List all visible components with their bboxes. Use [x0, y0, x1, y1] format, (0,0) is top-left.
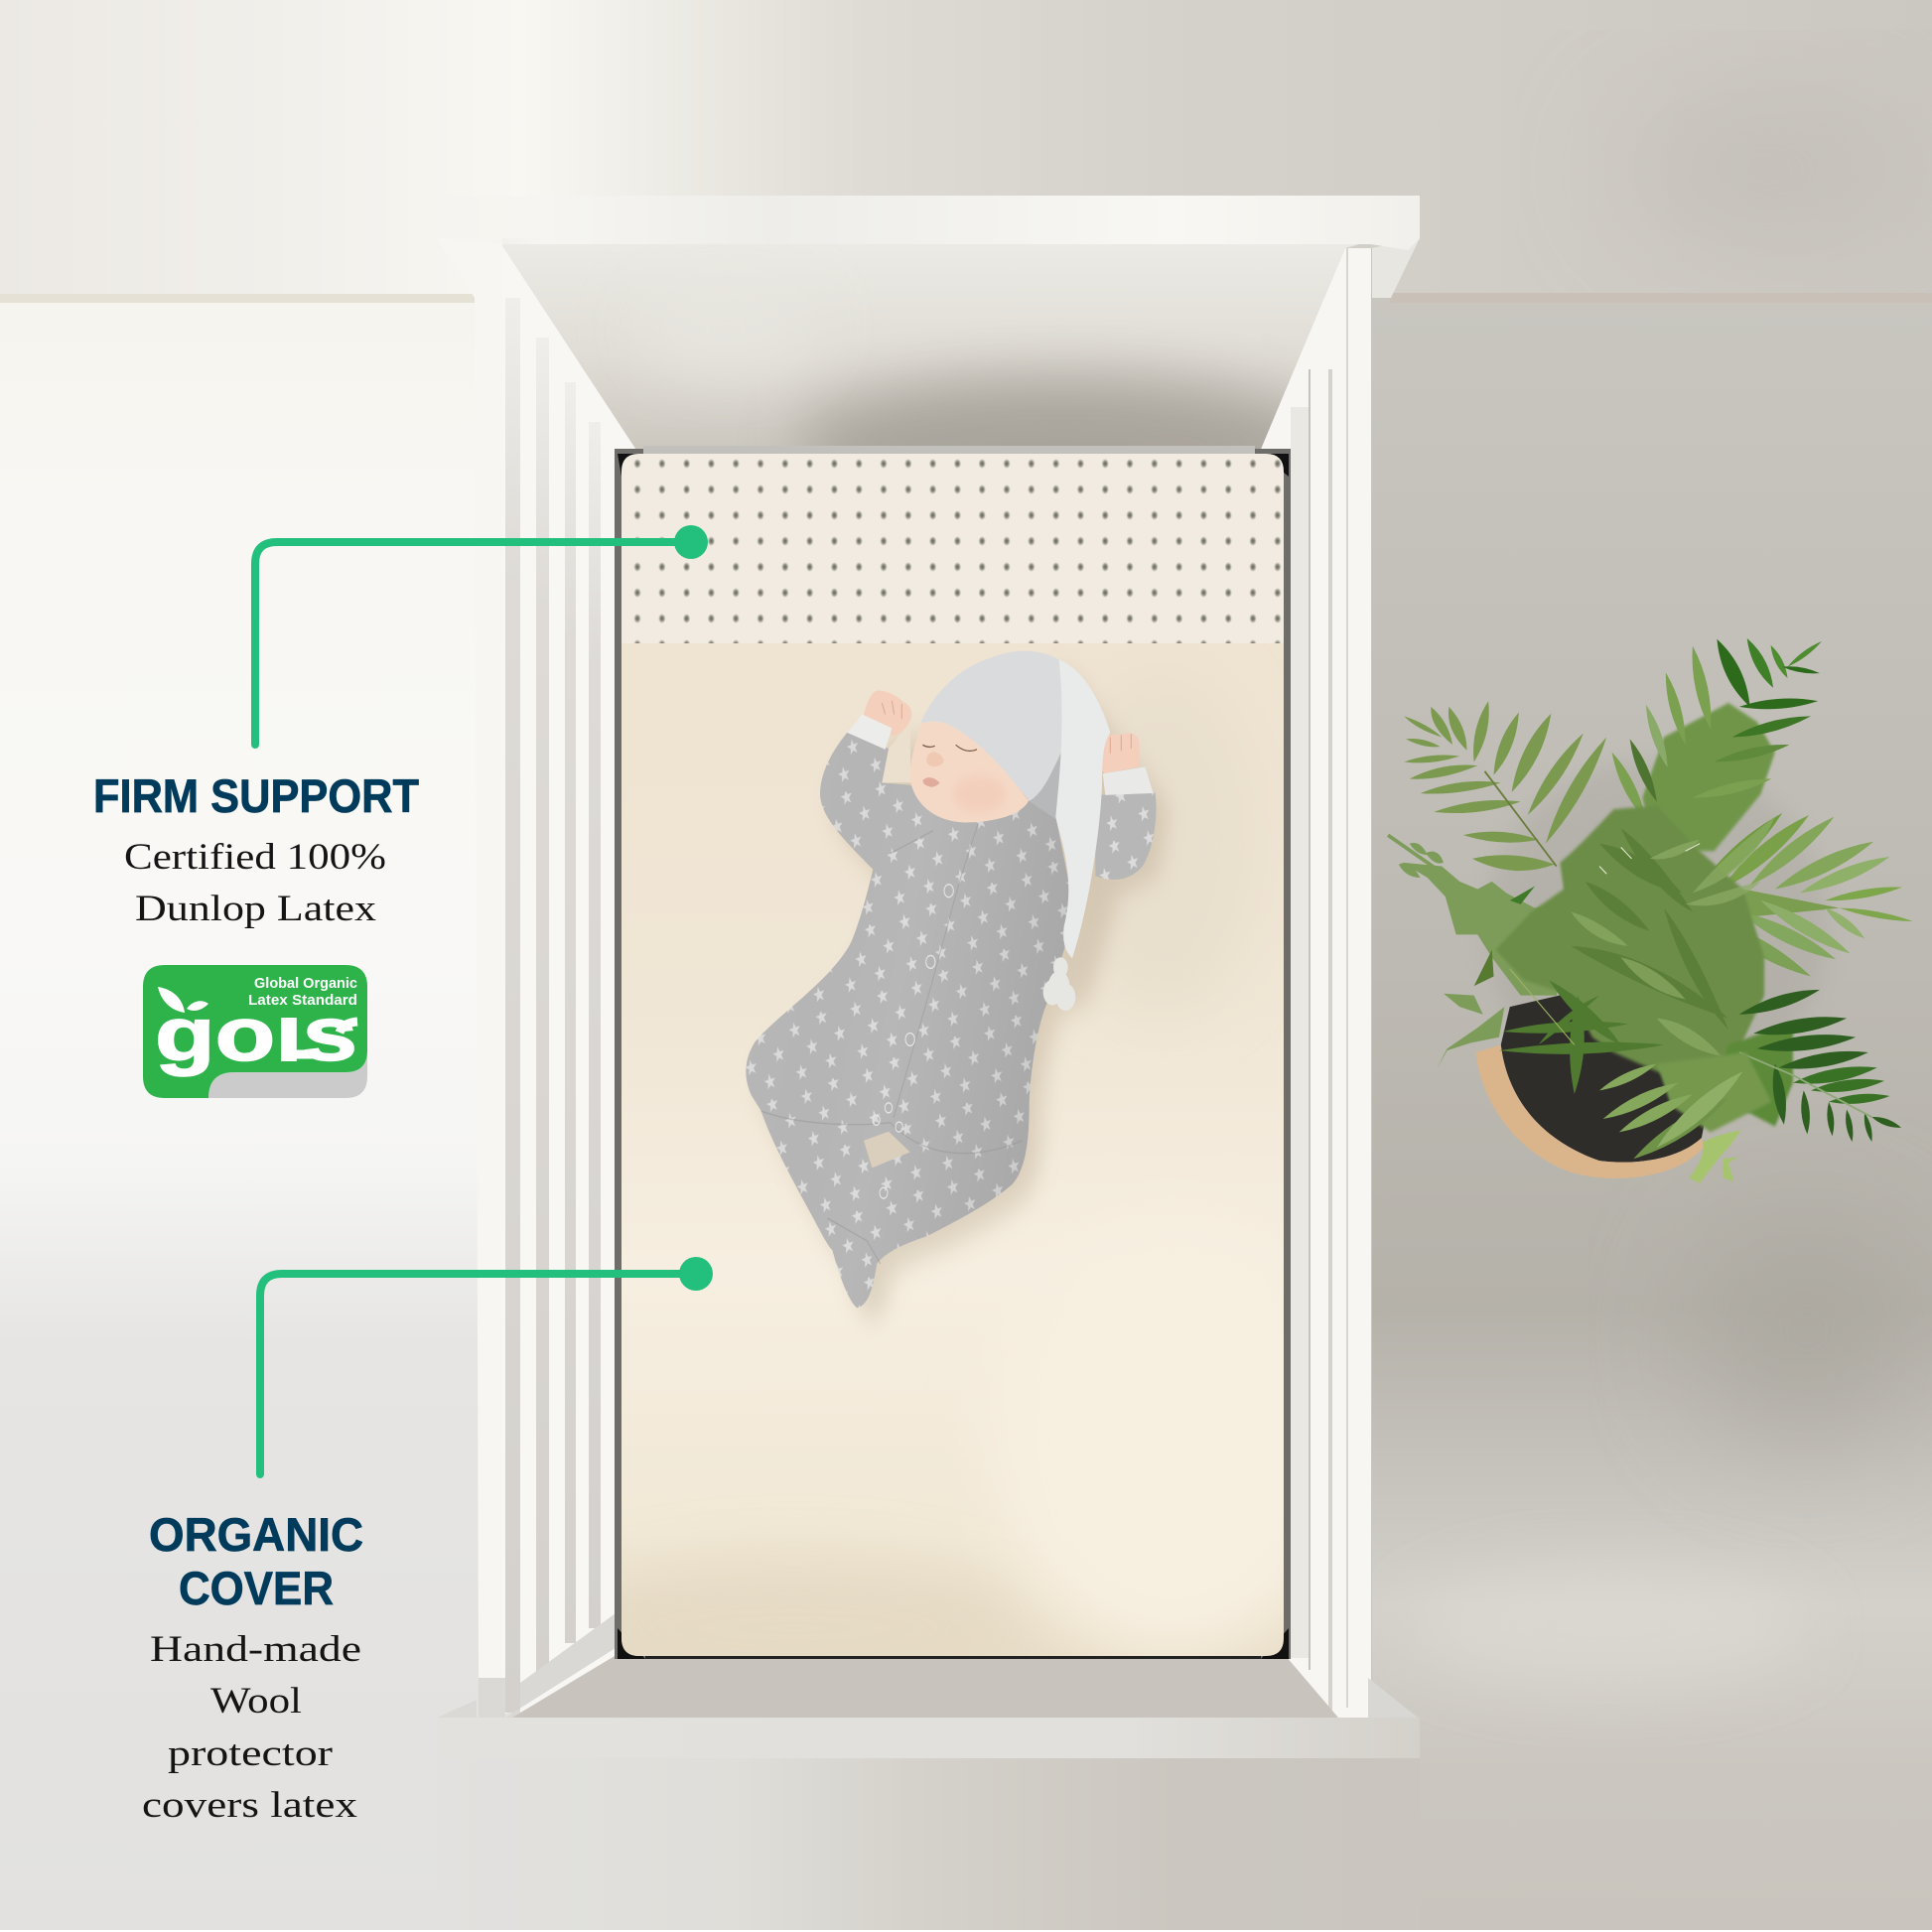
central foliage mass: [1495, 805, 1775, 1094]
text block: organic cover description: protector: [168, 1733, 333, 1774]
baby sleeping on the mattress: [746, 651, 1169, 1321]
heading: organic cover: [149, 1508, 363, 1614]
cap pompom: [1043, 957, 1075, 1011]
star-print onesie: [746, 733, 1072, 1308]
text block: firm support description: Certified 100%: [124, 837, 386, 878]
foot panel of the crib: [512, 1656, 1338, 1718]
right sleeve and cuff: [1095, 766, 1157, 880]
callout: organic cover connector: [260, 1257, 713, 1474]
text block: organic cover description: Hand-made: [150, 1629, 361, 1670]
frond: upper left: [1404, 701, 1606, 871]
left side rail with slats: [437, 238, 637, 1718]
left cuff: [847, 715, 892, 750]
head panel of the crib with soft shadow: [502, 244, 1358, 449]
panel: mattress wool cover: [621, 643, 1284, 1656]
gap between arm and head: [882, 724, 910, 782]
frond: bottom: [1599, 1052, 1771, 1183]
frond: top right: [1612, 638, 1822, 851]
baby face: [910, 722, 1030, 822]
frond: right: [1686, 813, 1913, 977]
mattress gap shadow: [615, 449, 1291, 1659]
text block: organic cover description: covers latex: [142, 1785, 358, 1826]
potted fern plant: [1388, 638, 1913, 1183]
callout: firm support connector: [255, 525, 708, 745]
icon: GOLS certification badge: Latex Standard: [248, 992, 357, 1009]
text block: firm support description: [124, 837, 386, 929]
crib: [425, 196, 1420, 1758]
left hand: [864, 690, 911, 737]
night cap: [920, 651, 1110, 1011]
plant shadow: [1485, 759, 1829, 1094]
heading: organic cover: COVER: [179, 1562, 334, 1614]
bottom rail: [437, 1718, 1420, 1758]
text block: firm support description: Dunlop Latex: [135, 889, 377, 929]
panel: latex core with perforated holes: [621, 454, 1284, 643]
top rail: [425, 196, 1420, 250]
baby shadow: [759, 671, 1169, 1321]
right side rail with slats: [1260, 238, 1420, 1718]
terracotta pot and soil: [1475, 988, 1728, 1178]
frond: far left: [1388, 835, 1571, 1069]
heading: organic cover: ORGANIC: [149, 1508, 363, 1561]
text block: organic cover description: Wool: [210, 1681, 302, 1722]
text block: organic cover description: [142, 1629, 361, 1826]
right hand: [1093, 733, 1139, 773]
icon: GOLS certification badge: [143, 965, 367, 1098]
icon: GOLS certification badge: Global Organic: [254, 975, 357, 992]
icon: GOLS certification badge: gols: [155, 993, 357, 1077]
heading: firm support: FIRM SUPPORT: [93, 769, 419, 822]
frond: lower right: [1715, 990, 1901, 1142]
